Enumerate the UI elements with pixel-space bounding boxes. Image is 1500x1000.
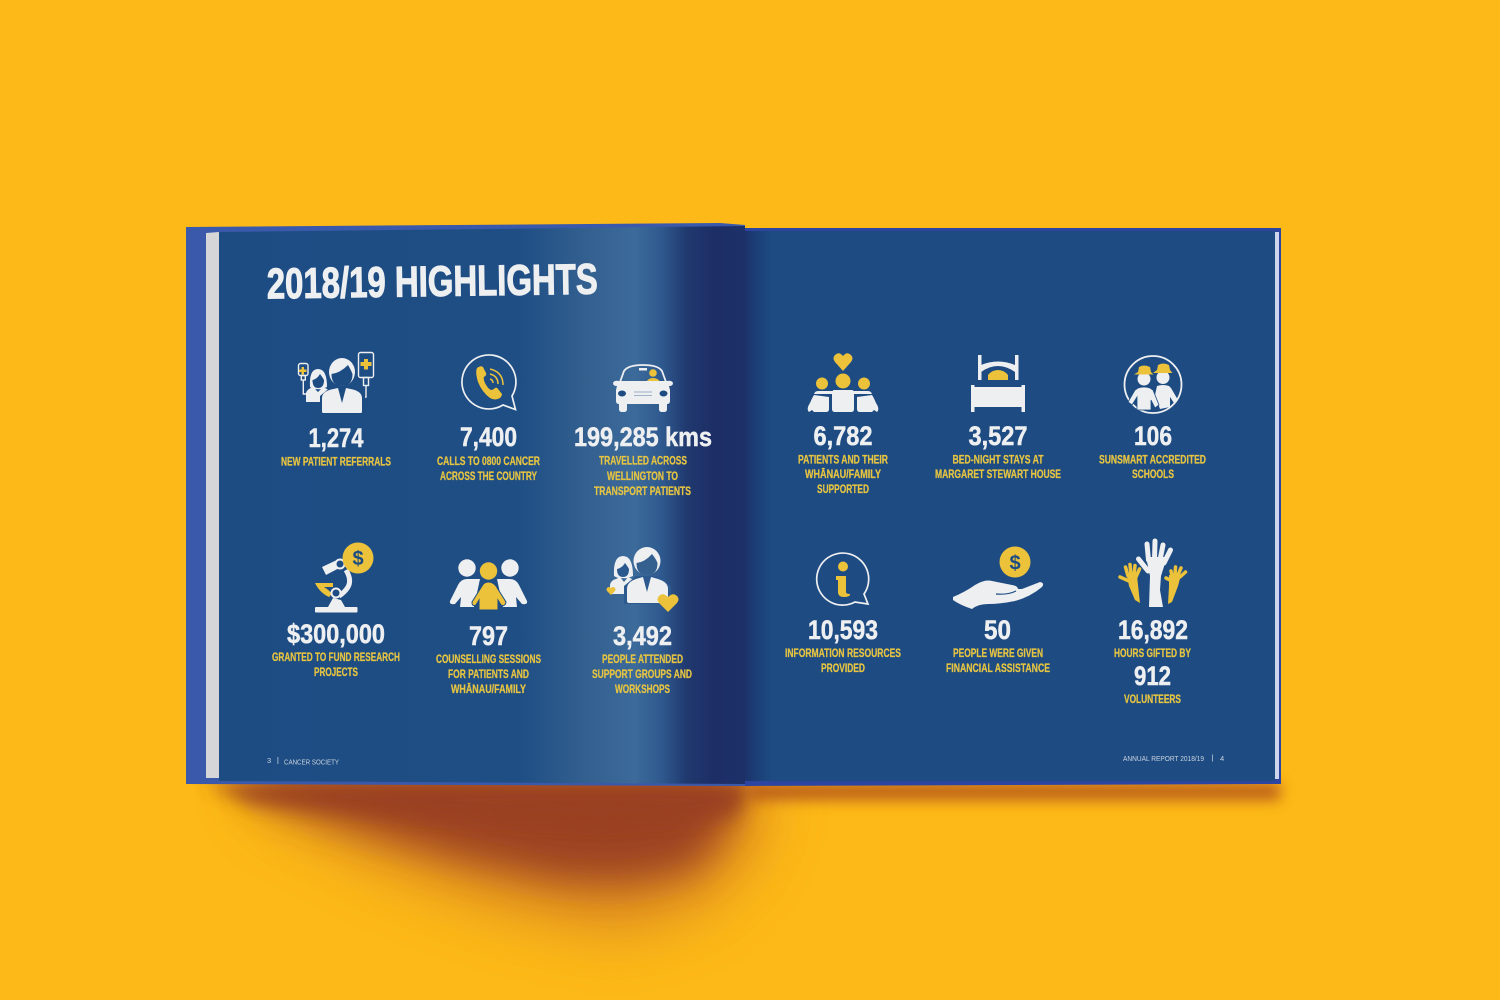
number: 10,593: [808, 615, 878, 645]
label: SUPPORTED: [817, 484, 869, 496]
label: PROJECTS: [314, 667, 358, 679]
panel: left page: [206, 226, 745, 784]
icon: patients with drip bags: [298, 352, 374, 414]
stat: calls: [437, 355, 541, 483]
stat: information resources: [785, 553, 901, 675]
label: WELLINGTON TO: [607, 471, 678, 483]
stat: support groups: [592, 547, 692, 696]
label: SUPPORT GROUPS AND: [592, 669, 692, 681]
label: [272, 652, 400, 679]
stat: kilometres: [574, 365, 712, 498]
title: 2018/19 HIGHLIGHTS: [266, 256, 598, 308]
footer: left page: [267, 756, 339, 766]
footer: right page: 4: [1220, 754, 1224, 763]
stat: new patient referrals: [281, 352, 391, 468]
label: [785, 648, 901, 675]
label: [594, 456, 691, 498]
icon: phone in speech bubble: [462, 355, 516, 410]
label: GRANTED TO FUND RESEARCH: [272, 652, 400, 664]
icon: children with sun hats: [1124, 356, 1182, 413]
footer: right page: ANNUAL REPORT 2018/19: [1123, 754, 1204, 763]
label: [946, 648, 1050, 675]
icon: raised hands: [1120, 541, 1186, 607]
label: FINANCIAL ASSISTANCE: [946, 663, 1050, 675]
label: PEOPLE ATTENDED: [602, 654, 683, 666]
label: [1099, 454, 1206, 481]
number: 3,527: [968, 421, 1028, 451]
icon: microscope and coin: $: [352, 548, 364, 570]
icon: car with driver: [613, 365, 673, 412]
number: 6,782: [814, 421, 872, 451]
label: INFORMATION RESOURCES: [785, 648, 901, 660]
label: VOLUNTEERS: [1124, 694, 1181, 706]
label: [935, 454, 1061, 481]
label: FOR PATIENTS AND: [448, 669, 529, 681]
book shadow: [205, 775, 1280, 930]
label: [592, 654, 692, 696]
icon: bed: [971, 355, 1025, 412]
label: HOURS GIFTED BY: [1114, 648, 1191, 660]
number: 16,892: [1118, 615, 1188, 645]
icon: people with hearts: [606, 547, 678, 612]
number: 7,400: [460, 422, 517, 452]
label: ACROSS THE COUNTRY: [440, 471, 537, 483]
label: SCHOOLS: [1132, 469, 1174, 481]
label: [436, 654, 541, 696]
stat: counselling sessions: [436, 559, 541, 696]
label: NEW PATIENT REFERRALS: [281, 456, 391, 468]
label: MARGARET STEWART HOUSE: [935, 469, 1061, 481]
stat: patients and families: [798, 353, 889, 496]
panel: right page: [745, 231, 1279, 781]
label: PATIENTS AND THEIR: [798, 454, 889, 466]
stat: bed-night stays: [935, 355, 1061, 481]
label: CALLS TO 0800 CANCER: [437, 456, 541, 468]
label: TRAVELLED ACROSS: [599, 456, 687, 468]
label: [798, 454, 889, 496]
icon: hand and coin: $: [1009, 552, 1021, 574]
stat: sunsmart schools: [1099, 356, 1206, 481]
label: TRANSPORT PATIENTS: [594, 486, 691, 498]
stat: volunteers: [1114, 541, 1191, 706]
footer: left page: 3: [267, 756, 271, 765]
label: COUNSELLING SESSIONS: [436, 654, 541, 666]
label: WHĀNAU/FAMILY: [451, 684, 526, 696]
stat: research grants: [272, 542, 400, 679]
icon: three people: [450, 559, 527, 610]
number: 797: [469, 621, 508, 651]
label: PROVIDED: [821, 663, 865, 675]
stat: financial assistance: [946, 546, 1050, 675]
number: 1,274: [308, 423, 364, 453]
number: $300,000: [287, 619, 385, 649]
book cover: [186, 223, 1281, 786]
label: PEOPLE WERE GIVEN: [953, 648, 1043, 660]
label: SUNSMART ACCREDITED: [1099, 454, 1206, 466]
label: WHĀNAU/FAMILY: [805, 469, 881, 481]
number: 912: [1134, 661, 1171, 691]
number: 106: [1134, 421, 1172, 451]
number: 3,492: [613, 621, 672, 651]
number: 50: [984, 615, 1011, 645]
footer: left page: CANCER SOCIETY: [284, 758, 339, 766]
icon: family with heart: [808, 353, 878, 412]
label: WORKSHOPS: [615, 684, 670, 696]
label: BED-NIGHT STAYS AT: [952, 454, 1044, 466]
number: 199,285 kms: [574, 422, 712, 452]
label: [437, 456, 541, 483]
icon: info speech bubble: [817, 553, 869, 605]
